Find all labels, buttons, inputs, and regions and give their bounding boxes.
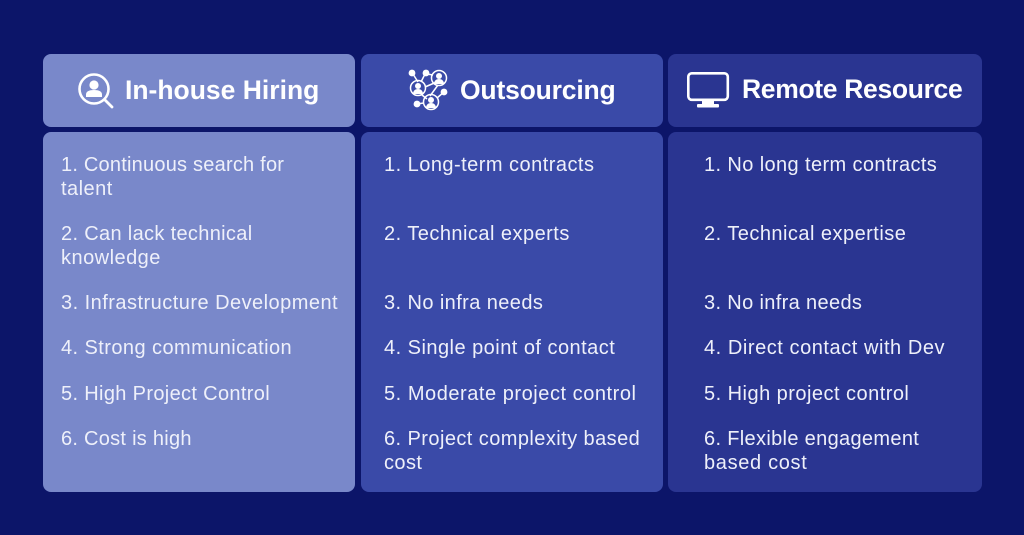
item 2: knowledge bbox=[61, 247, 161, 269]
item 1 bbox=[61, 154, 284, 200]
header panel: remote resource bbox=[668, 54, 982, 127]
item 2: 2. Technical experts bbox=[384, 223, 570, 245]
item 3: 3. Infrastructure Development bbox=[61, 292, 338, 314]
item 3: 3. No infra needs bbox=[384, 292, 543, 314]
body panel: in-house hiring bbox=[43, 132, 355, 492]
item 3: 3. No infra needs bbox=[704, 292, 862, 314]
icon: monitor bbox=[687, 72, 730, 108]
item 5: 5. High project control bbox=[704, 383, 909, 405]
item 4: 4. Strong communication bbox=[61, 337, 292, 359]
heading: In-house Hiring: In-house Hiring bbox=[125, 75, 319, 105]
panel: in-house hiring column bbox=[43, 54, 355, 492]
item 6: 6. Project complexity based bbox=[384, 428, 640, 450]
item 5: 5. High Project Control bbox=[61, 383, 270, 405]
item 6: cost bbox=[384, 452, 422, 474]
item 2: 2. Technical expertise bbox=[704, 223, 906, 245]
panel: outsourcing column bbox=[361, 54, 663, 492]
item 1: 1. Long-term contracts bbox=[384, 154, 594, 176]
item 6 bbox=[704, 428, 919, 474]
item 2 bbox=[61, 223, 252, 269]
item 1: 1. No long term contracts bbox=[704, 154, 937, 176]
heading: Remote Resource: Remote Resource bbox=[742, 74, 962, 104]
item 1: 1. Continuous search for bbox=[61, 154, 284, 176]
icon: magnifier with person bbox=[78, 73, 114, 108]
item 6: 6. Cost is high bbox=[61, 428, 192, 450]
item 4: 4. Direct contact with Dev bbox=[704, 337, 945, 359]
panel: remote resource column bbox=[668, 54, 982, 492]
heading: Outsourcing: Outsourcing bbox=[460, 75, 616, 105]
body panel: outsourcing bbox=[361, 132, 663, 492]
header panel: in-house hiring bbox=[43, 54, 355, 127]
item 6: based cost bbox=[704, 452, 807, 474]
item 4: 4. Single point of contact bbox=[384, 337, 615, 359]
item 6: 6. Flexible engagement bbox=[704, 428, 919, 450]
item 5: 5. Moderate project control bbox=[384, 383, 636, 405]
item 6 bbox=[384, 428, 640, 474]
list: remote resource points bbox=[704, 154, 945, 474]
header panel: outsourcing bbox=[361, 54, 663, 127]
icon: connected people network bbox=[408, 70, 448, 110]
item 2: 2. Can lack technical bbox=[61, 223, 252, 245]
body panel: remote resource bbox=[668, 132, 982, 492]
item 1: talent bbox=[61, 178, 113, 200]
list: in-house hiring points bbox=[61, 154, 338, 450]
list: outsourcing points bbox=[384, 154, 640, 474]
